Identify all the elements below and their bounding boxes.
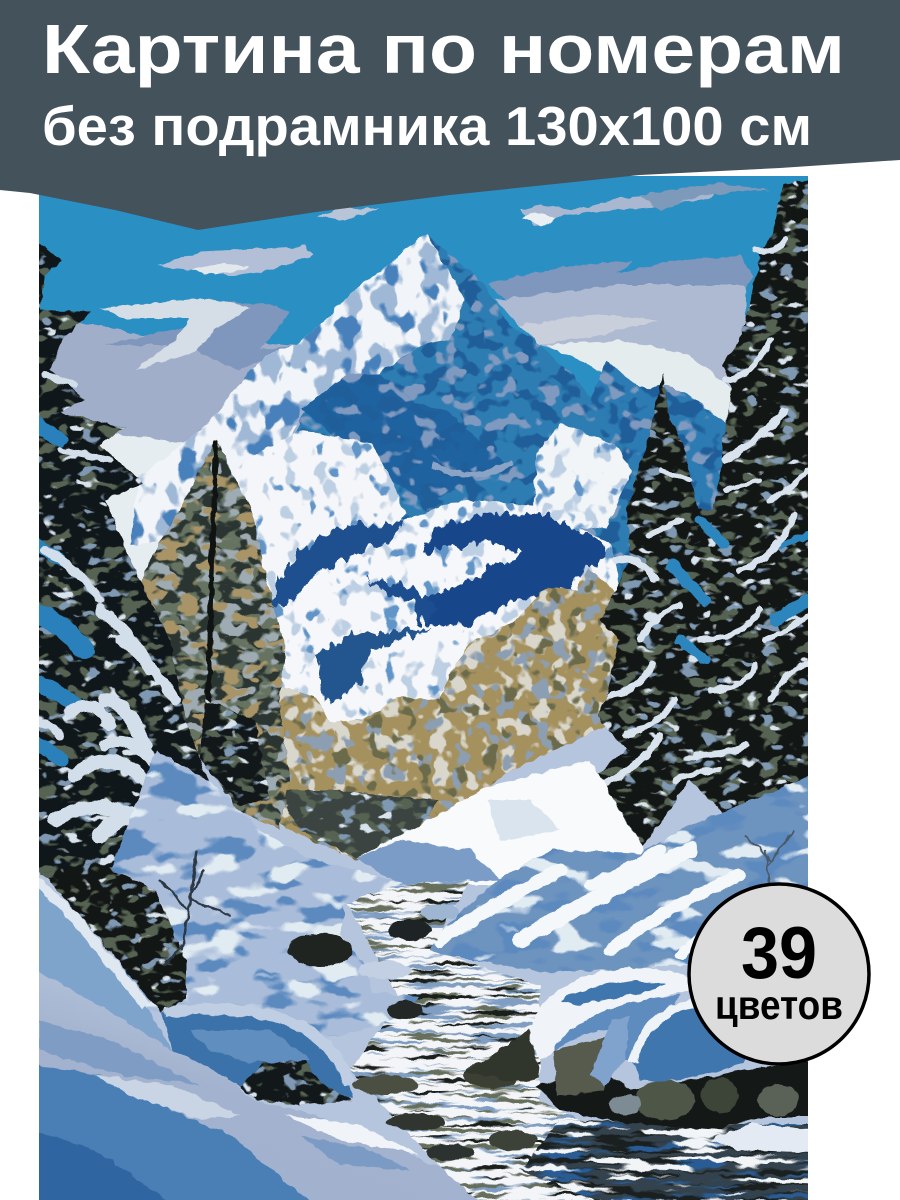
lower underpainting — [39, 680, 808, 1200]
golden trees — [252, 567, 627, 860]
dark rock under trees — [42, 863, 186, 1012]
snow on far right shore — [710, 1123, 830, 1153]
snow boughs — [35, 375, 175, 850]
blue forests — [269, 513, 607, 707]
header banner — [0, 0, 900, 230]
fir snow streaks — [600, 240, 808, 785]
lit snow face — [130, 234, 465, 545]
sky — [39, 176, 808, 398]
snowy hills — [280, 500, 618, 723]
dark lower water — [520, 1120, 830, 1200]
foreground snow bank — [30, 870, 490, 1200]
bank white streaks — [440, 850, 740, 955]
bare bush — [160, 850, 230, 965]
larch dark base — [200, 700, 270, 805]
tree: mid-left larch — [142, 440, 290, 830]
rocks in stream — [288, 904, 537, 1160]
shadowed cirque — [302, 373, 505, 505]
stream — [340, 880, 830, 1200]
tree: right big fir — [598, 180, 808, 846]
subtitle: без подрамника 130х100 см — [42, 95, 812, 157]
snow lobe two — [633, 1000, 746, 1081]
back snow valley — [356, 760, 650, 885]
dark undergrowth — [275, 790, 439, 858]
snow lobe one — [530, 968, 692, 1060]
tree: left big fir — [39, 244, 209, 874]
clouds — [30, 183, 770, 610]
badge number: 39 — [741, 913, 817, 994]
blue gaps — [30, 420, 85, 760]
front slope — [30, 967, 490, 1200]
painting: winter mountain landscape — [20, 160, 830, 1200]
larch trunk — [208, 440, 216, 720]
badge label: цветов — [715, 982, 843, 1028]
snow shoulder — [232, 430, 406, 600]
fir blue gaps — [672, 520, 808, 660]
mountain main body — [130, 234, 632, 600]
distant right ridge — [571, 360, 726, 570]
back lobe — [39, 889, 173, 1052]
snow overhang — [162, 1008, 352, 1098]
badge: 39 colours — [689, 884, 869, 1064]
bush on right hill — [745, 830, 795, 885]
title: Картина по номерам — [42, 10, 845, 88]
dark rock under overhang — [240, 1060, 352, 1105]
snow bank: left hill — [42, 750, 419, 1037]
right crest snow — [533, 423, 632, 530]
snow-capped boulders right — [463, 968, 830, 1153]
snow bank: right hill — [430, 776, 808, 974]
grey arc under cirque — [432, 462, 512, 474]
